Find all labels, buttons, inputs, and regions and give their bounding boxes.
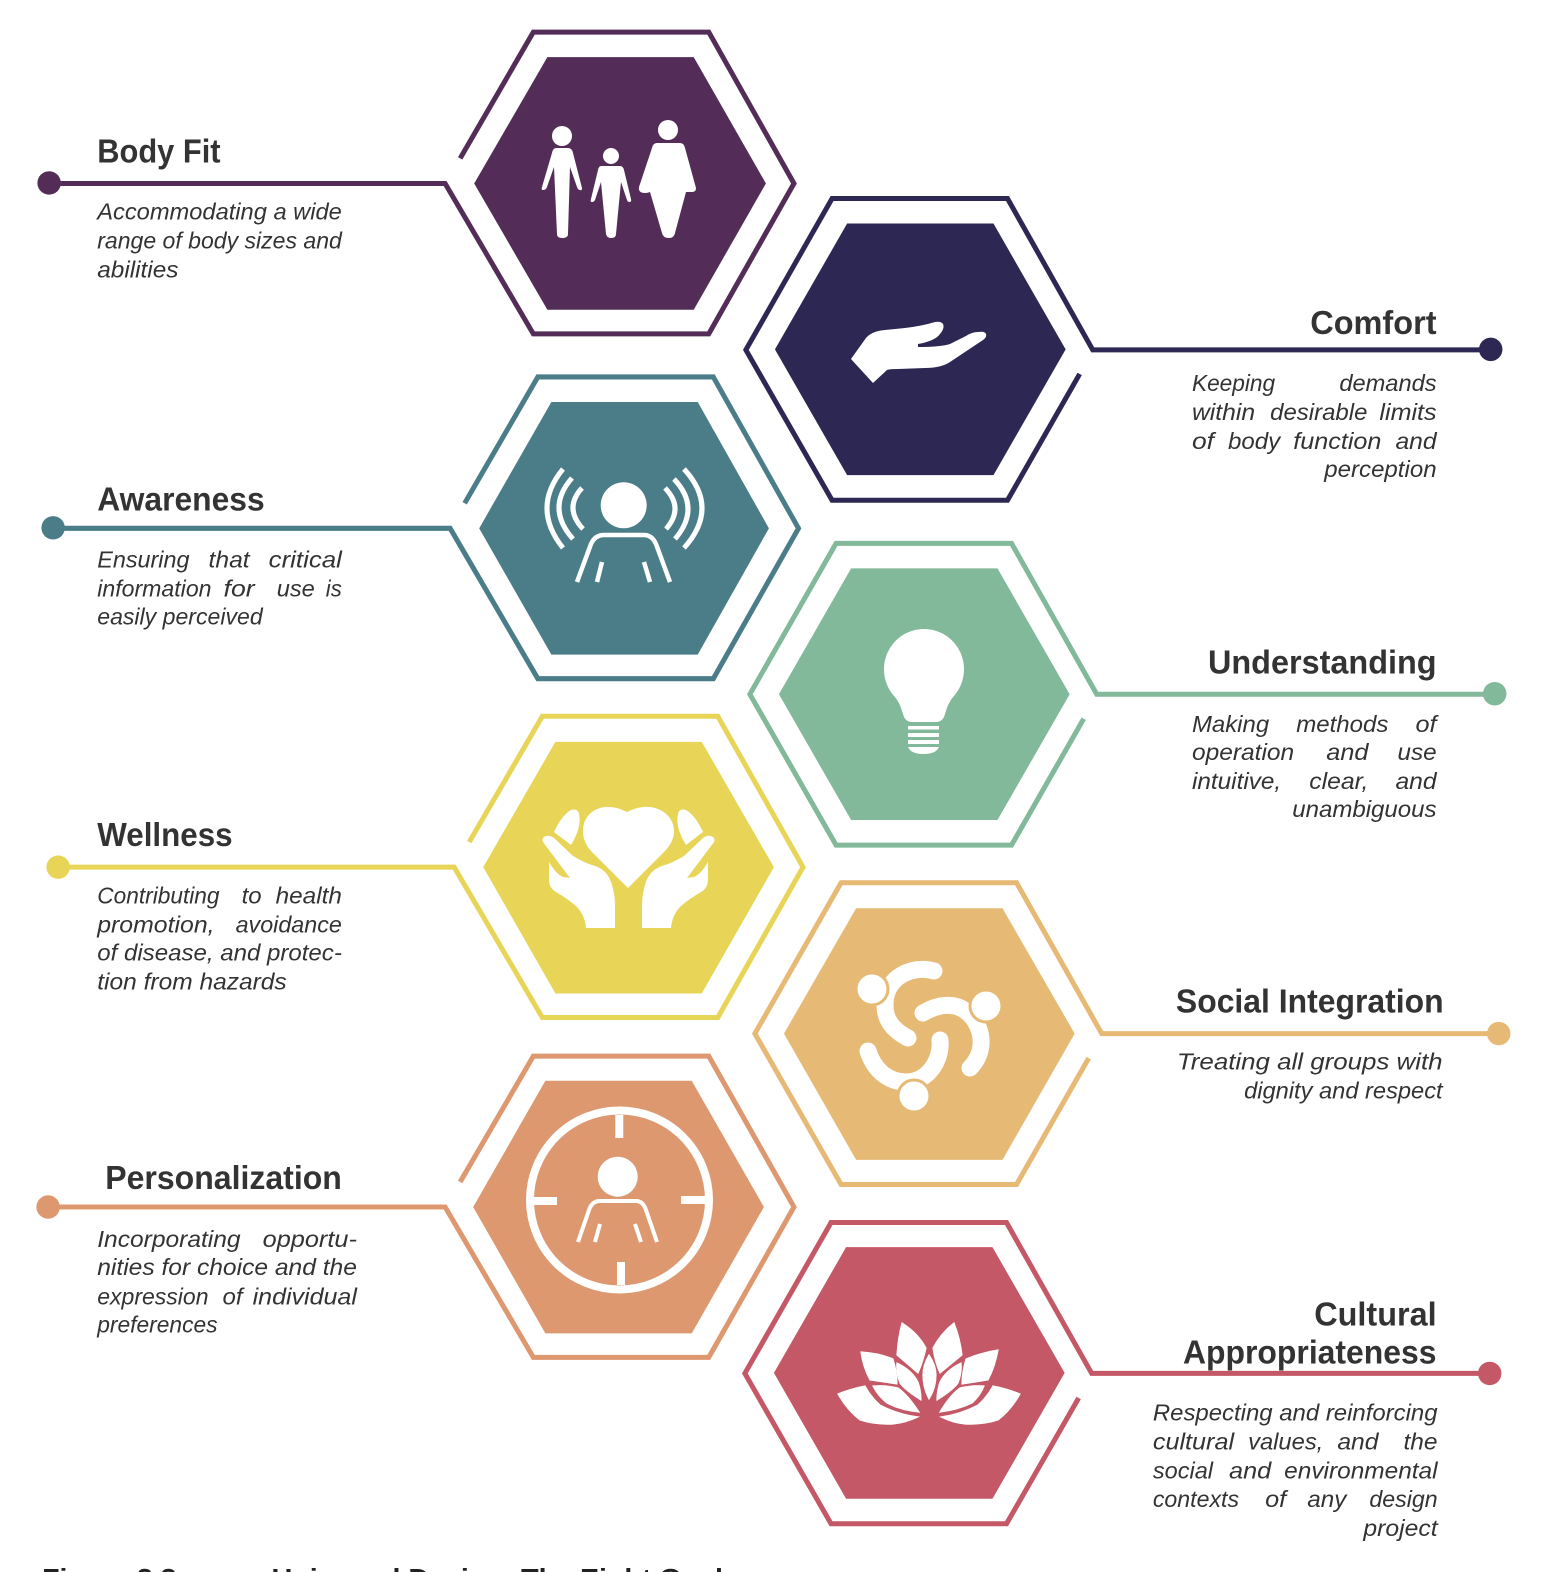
panel: comfort xyxy=(746,198,1502,500)
text block: cultural appropriateness xyxy=(1153,1400,1439,1541)
text block: awareness: for xyxy=(224,575,256,601)
hexagon frame and leader line: comfort xyxy=(746,198,1491,500)
text block: comfort: function xyxy=(1293,428,1381,454)
text block: comfort: and xyxy=(1395,428,1438,454)
panel: body fit xyxy=(37,32,794,334)
text block: comfort: body xyxy=(1228,428,1281,454)
icon: person in target xyxy=(530,1110,709,1289)
hexagon frame and leader line: understanding xyxy=(750,543,1495,845)
heading: wellness: Wellness xyxy=(97,817,233,854)
text block: understanding: clear, xyxy=(1309,768,1368,794)
icon: three people in a circle xyxy=(856,969,1002,1112)
text block: body fit: Accommodating a wide xyxy=(95,199,342,225)
text block: understanding: operation xyxy=(1192,739,1294,765)
text block: wellness: promotion, xyxy=(96,911,215,937)
text block: personalization: preferences xyxy=(96,1311,218,1337)
leader dot: comfort xyxy=(1479,338,1502,361)
leader dot: cultural appropriateness xyxy=(1478,1362,1501,1385)
text block: cultural appropriateness: and xyxy=(1229,1458,1272,1484)
icon: open hand xyxy=(851,322,986,383)
text block: social integration: Treating all groups with xyxy=(1177,1049,1443,1075)
text block: personalization: of xyxy=(223,1283,245,1309)
text block: wellness: health xyxy=(276,882,342,908)
text block: understanding: and xyxy=(1326,739,1369,765)
text block: cultural appropriateness: any xyxy=(1307,1486,1348,1512)
text block: body fit: abilities xyxy=(97,257,179,283)
icon: lotus flower xyxy=(838,1323,1020,1424)
text block: understanding: methods xyxy=(1296,711,1389,737)
text block: cultural appropriateness: and xyxy=(1337,1429,1379,1455)
text block: comfort xyxy=(1192,370,1438,482)
heading: understanding: Understanding xyxy=(1208,645,1437,682)
hexagon: understanding xyxy=(779,568,1070,820)
text block: cultural appropriateness: cultural xyxy=(1153,1429,1235,1455)
heading: cultural appropriateness: Cultural xyxy=(1314,1296,1437,1333)
text block: cultural appropriateness: contexts xyxy=(1153,1486,1239,1512)
text block: understanding: unambiguous xyxy=(1292,796,1437,822)
text block: cultural appropriateness: project xyxy=(1362,1515,1439,1541)
text block: comfort: demands xyxy=(1339,370,1437,396)
text block: cultural appropriateness: the xyxy=(1403,1429,1438,1455)
text block: wellness: to xyxy=(242,882,262,908)
text block: awareness: information xyxy=(97,575,212,601)
hexagon frame and leader line: awareness xyxy=(53,377,798,679)
text block: body fit xyxy=(95,199,343,283)
panel: wellness xyxy=(46,716,803,1018)
icon: three people of different sizes xyxy=(542,120,696,238)
hexagon frame and leader line: wellness xyxy=(58,716,803,1018)
hexagon: comfort xyxy=(775,224,1066,475)
heading: social integration: Social Integration xyxy=(1176,984,1444,1021)
panel: understanding xyxy=(750,543,1506,845)
hexagon: cultural appropriateness xyxy=(774,1247,1065,1499)
heading: personalization: Personalization xyxy=(105,1160,342,1197)
hexagon: wellness xyxy=(483,742,774,993)
panel: awareness xyxy=(41,377,798,679)
text block: understanding: of xyxy=(1416,711,1439,737)
panel: social integration xyxy=(755,883,1510,1184)
heading: cultural appropriateness: Appropriateness xyxy=(1183,1334,1437,1371)
text block: awareness xyxy=(97,546,343,630)
hexagon frame and leader line: personalization xyxy=(48,1056,794,1357)
hexagon: personalization xyxy=(473,1081,764,1333)
panel: cultural appropriateness xyxy=(745,1223,1501,1541)
text block: comfort: limits xyxy=(1379,399,1437,425)
hexagon frame and leader line: cultural appropriateness xyxy=(745,1223,1490,1524)
hexagon: awareness xyxy=(479,402,769,655)
text block: social integration: dignity and respect xyxy=(1244,1078,1444,1104)
leader dot: understanding xyxy=(1483,682,1506,705)
text block: awareness: critical xyxy=(269,546,343,572)
text block: awareness: that xyxy=(209,546,251,572)
text block: wellness: avoidance xyxy=(236,911,342,937)
text block: personalization: opportu- xyxy=(263,1226,357,1252)
text block: comfort: perception xyxy=(1323,456,1437,482)
text block: social integration xyxy=(1177,1049,1444,1104)
hexagon frame and leader line: body fit xyxy=(49,32,794,334)
text block: cultural appropriateness: social xyxy=(1153,1458,1214,1484)
leader dot: social integration xyxy=(1487,1022,1510,1045)
text block: comfort: desirable xyxy=(1270,399,1367,425)
text block: understanding: use xyxy=(1397,739,1437,765)
heading: comfort: Comfort xyxy=(1310,305,1437,342)
icon: person with signal waves xyxy=(547,469,702,582)
heading: cultural appropriateness xyxy=(1183,1296,1437,1371)
text block: comfort: Keeping xyxy=(1192,370,1275,396)
text block: cultural appropriateness: of xyxy=(1265,1486,1289,1512)
leader dot: personalization xyxy=(36,1195,60,1219)
text block: wellness: tion from hazards xyxy=(97,968,287,994)
text block: awareness: easily perceived xyxy=(97,604,264,630)
text block: personalization: expression xyxy=(97,1283,209,1309)
text block: wellness xyxy=(96,882,342,994)
text block: comfort: of xyxy=(1192,428,1217,454)
text block: comfort: within xyxy=(1192,399,1255,425)
text block: cultural appropriateness: environmental xyxy=(1284,1458,1438,1484)
text block: awareness: Ensuring xyxy=(97,546,189,572)
hexagon: social integration xyxy=(784,908,1075,1160)
text block: cultural appropriateness: design xyxy=(1369,1486,1438,1512)
leader dot: body fit xyxy=(37,171,61,195)
text block: personalization: Incorporating xyxy=(97,1226,241,1252)
text block: body fit: range of body sizes and xyxy=(97,228,343,254)
hexagon: body fit xyxy=(474,57,766,310)
leader dot: wellness xyxy=(46,855,70,879)
text block: personalization: nities for choice and the xyxy=(97,1254,357,1280)
panel: personalization xyxy=(36,1056,794,1357)
text block: awareness: use xyxy=(277,575,315,601)
text block: understanding xyxy=(1192,711,1439,822)
text block: personalization: individual xyxy=(253,1283,358,1309)
heading: awareness: Awareness xyxy=(97,481,265,518)
heading: body fit: Body Fit xyxy=(97,133,221,170)
text block: wellness: Contributing xyxy=(97,882,220,908)
leader dot: awareness xyxy=(41,516,65,540)
text block: understanding: and xyxy=(1395,768,1438,794)
text block: understanding: Making xyxy=(1192,711,1269,737)
text block: awareness: is xyxy=(326,575,342,601)
icon: hands holding heart xyxy=(542,807,715,928)
text block: personalization xyxy=(96,1226,358,1337)
icon: light bulb xyxy=(884,629,964,754)
text block: cultural appropriateness: values, xyxy=(1248,1429,1323,1455)
hexagon frame and leader line: social integration xyxy=(755,883,1499,1184)
text block: understanding: intuitive, xyxy=(1192,768,1281,794)
text block: wellness: of disease, and protec- xyxy=(97,939,342,965)
text block: cultural appropriateness: Respecting and reinforcing xyxy=(1153,1400,1438,1426)
